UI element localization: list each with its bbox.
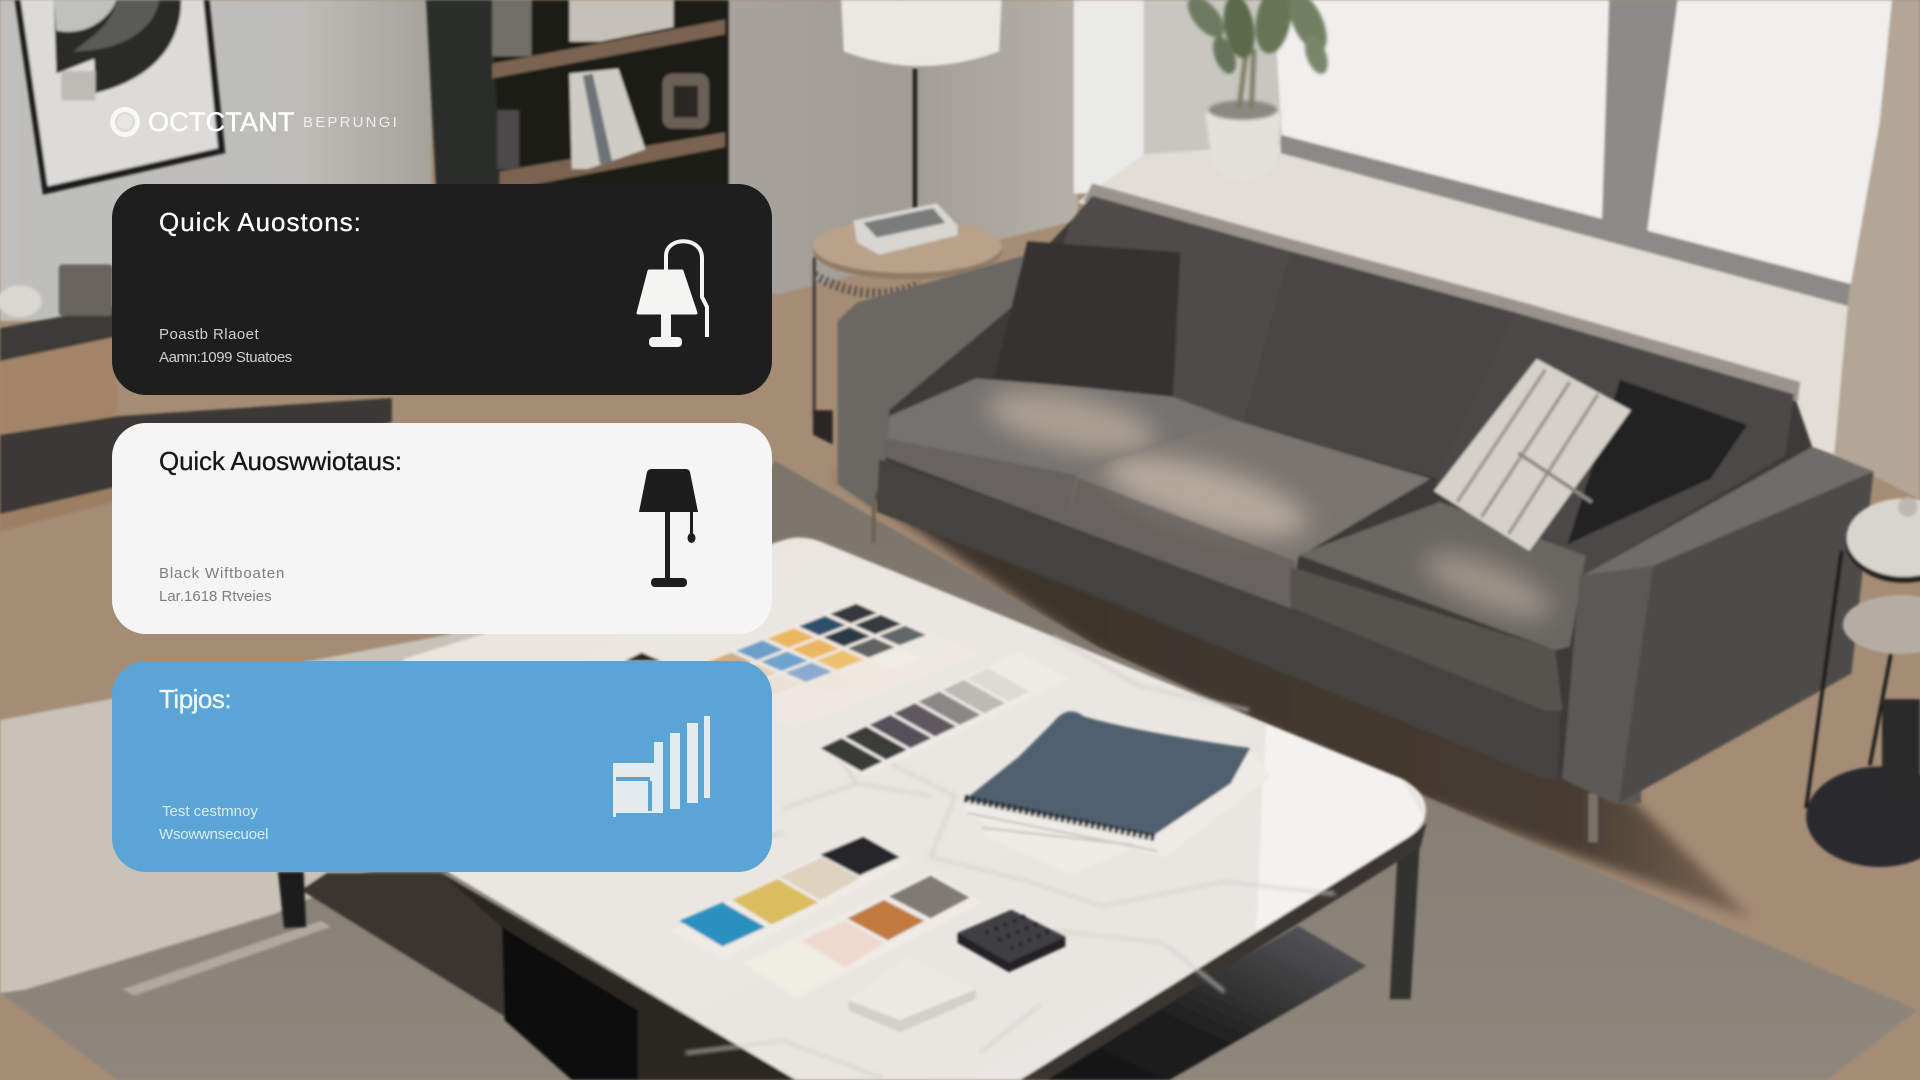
sofa backrest — [1016, 184, 1800, 576]
sofa seat base — [877, 459, 1560, 779]
marble veins — [686, 637, 1335, 1078]
icon: signal bars and drawer — [613, 716, 710, 817]
sofa left arm — [838, 255, 1027, 507]
brand logo — [110, 107, 399, 137]
fabric samples — [965, 711, 1271, 874]
colour chip row two — [742, 872, 982, 999]
heading: Tipjos: — [159, 684, 231, 714]
table reflection — [1256, 725, 1424, 931]
sofa seat cushion left — [885, 378, 1234, 525]
colour chip row one — [671, 833, 911, 960]
colour swatch grid — [670, 600, 980, 728]
heading: Quick Auostons: — [159, 207, 362, 237]
floor lamp — [841, 0, 1002, 208]
small dark object on table — [624, 653, 661, 661]
brand tagline: BEPRUNGI — [303, 114, 399, 131]
bookshelf — [426, 0, 729, 186]
brand name: OCTCTANT — [148, 107, 295, 137]
body text — [159, 326, 292, 366]
body text — [159, 565, 285, 605]
body text: Black Wiftboaten — [159, 565, 285, 582]
potted plant — [1181, 0, 1335, 181]
heading: Quick Auoswwiotaus: — [159, 446, 402, 476]
body text: Test cestmnoy — [162, 803, 258, 820]
dark keypad sample — [958, 910, 1065, 972]
striped pillow — [1434, 359, 1631, 551]
dark pillow right — [1567, 380, 1747, 545]
table marble top — [367, 537, 1426, 1080]
dark pillow left — [994, 241, 1180, 397]
sofa seat cushion right — [1291, 502, 1586, 710]
sofa — [838, 184, 1873, 842]
icon: arc table lamp — [636, 239, 709, 347]
body text: Poastb Rlaoet — [159, 326, 259, 343]
wall art — [15, 0, 225, 195]
panel: quick questions — [112, 184, 772, 395]
right side table — [1806, 497, 1920, 867]
sofa body backing — [879, 220, 1812, 779]
sofa right arm — [1562, 447, 1873, 804]
neutral swatch strip — [816, 652, 1069, 776]
body text: Lar.1618 Rtveies — [159, 588, 272, 605]
white sample block — [849, 956, 976, 1032]
icon: table lamp — [639, 469, 698, 587]
panel: quick answers — [112, 423, 772, 634]
sideboard — [0, 264, 392, 531]
body text: Aamn:1099 Stuatoes — [159, 349, 292, 366]
body text: Wsowwnsecuoel — [159, 826, 268, 843]
panel: tips — [112, 661, 772, 872]
coffee table — [278, 537, 1427, 1080]
area rug — [0, 460, 1918, 1080]
table undershelf and legs — [278, 823, 1427, 1080]
logo ring icon — [110, 107, 140, 137]
side table with books — [813, 203, 1002, 444]
shaded floor under sofa — [833, 471, 1751, 918]
sofa seat cushion middle — [1067, 420, 1430, 609]
body text — [159, 803, 268, 843]
window — [1273, 0, 1920, 500]
